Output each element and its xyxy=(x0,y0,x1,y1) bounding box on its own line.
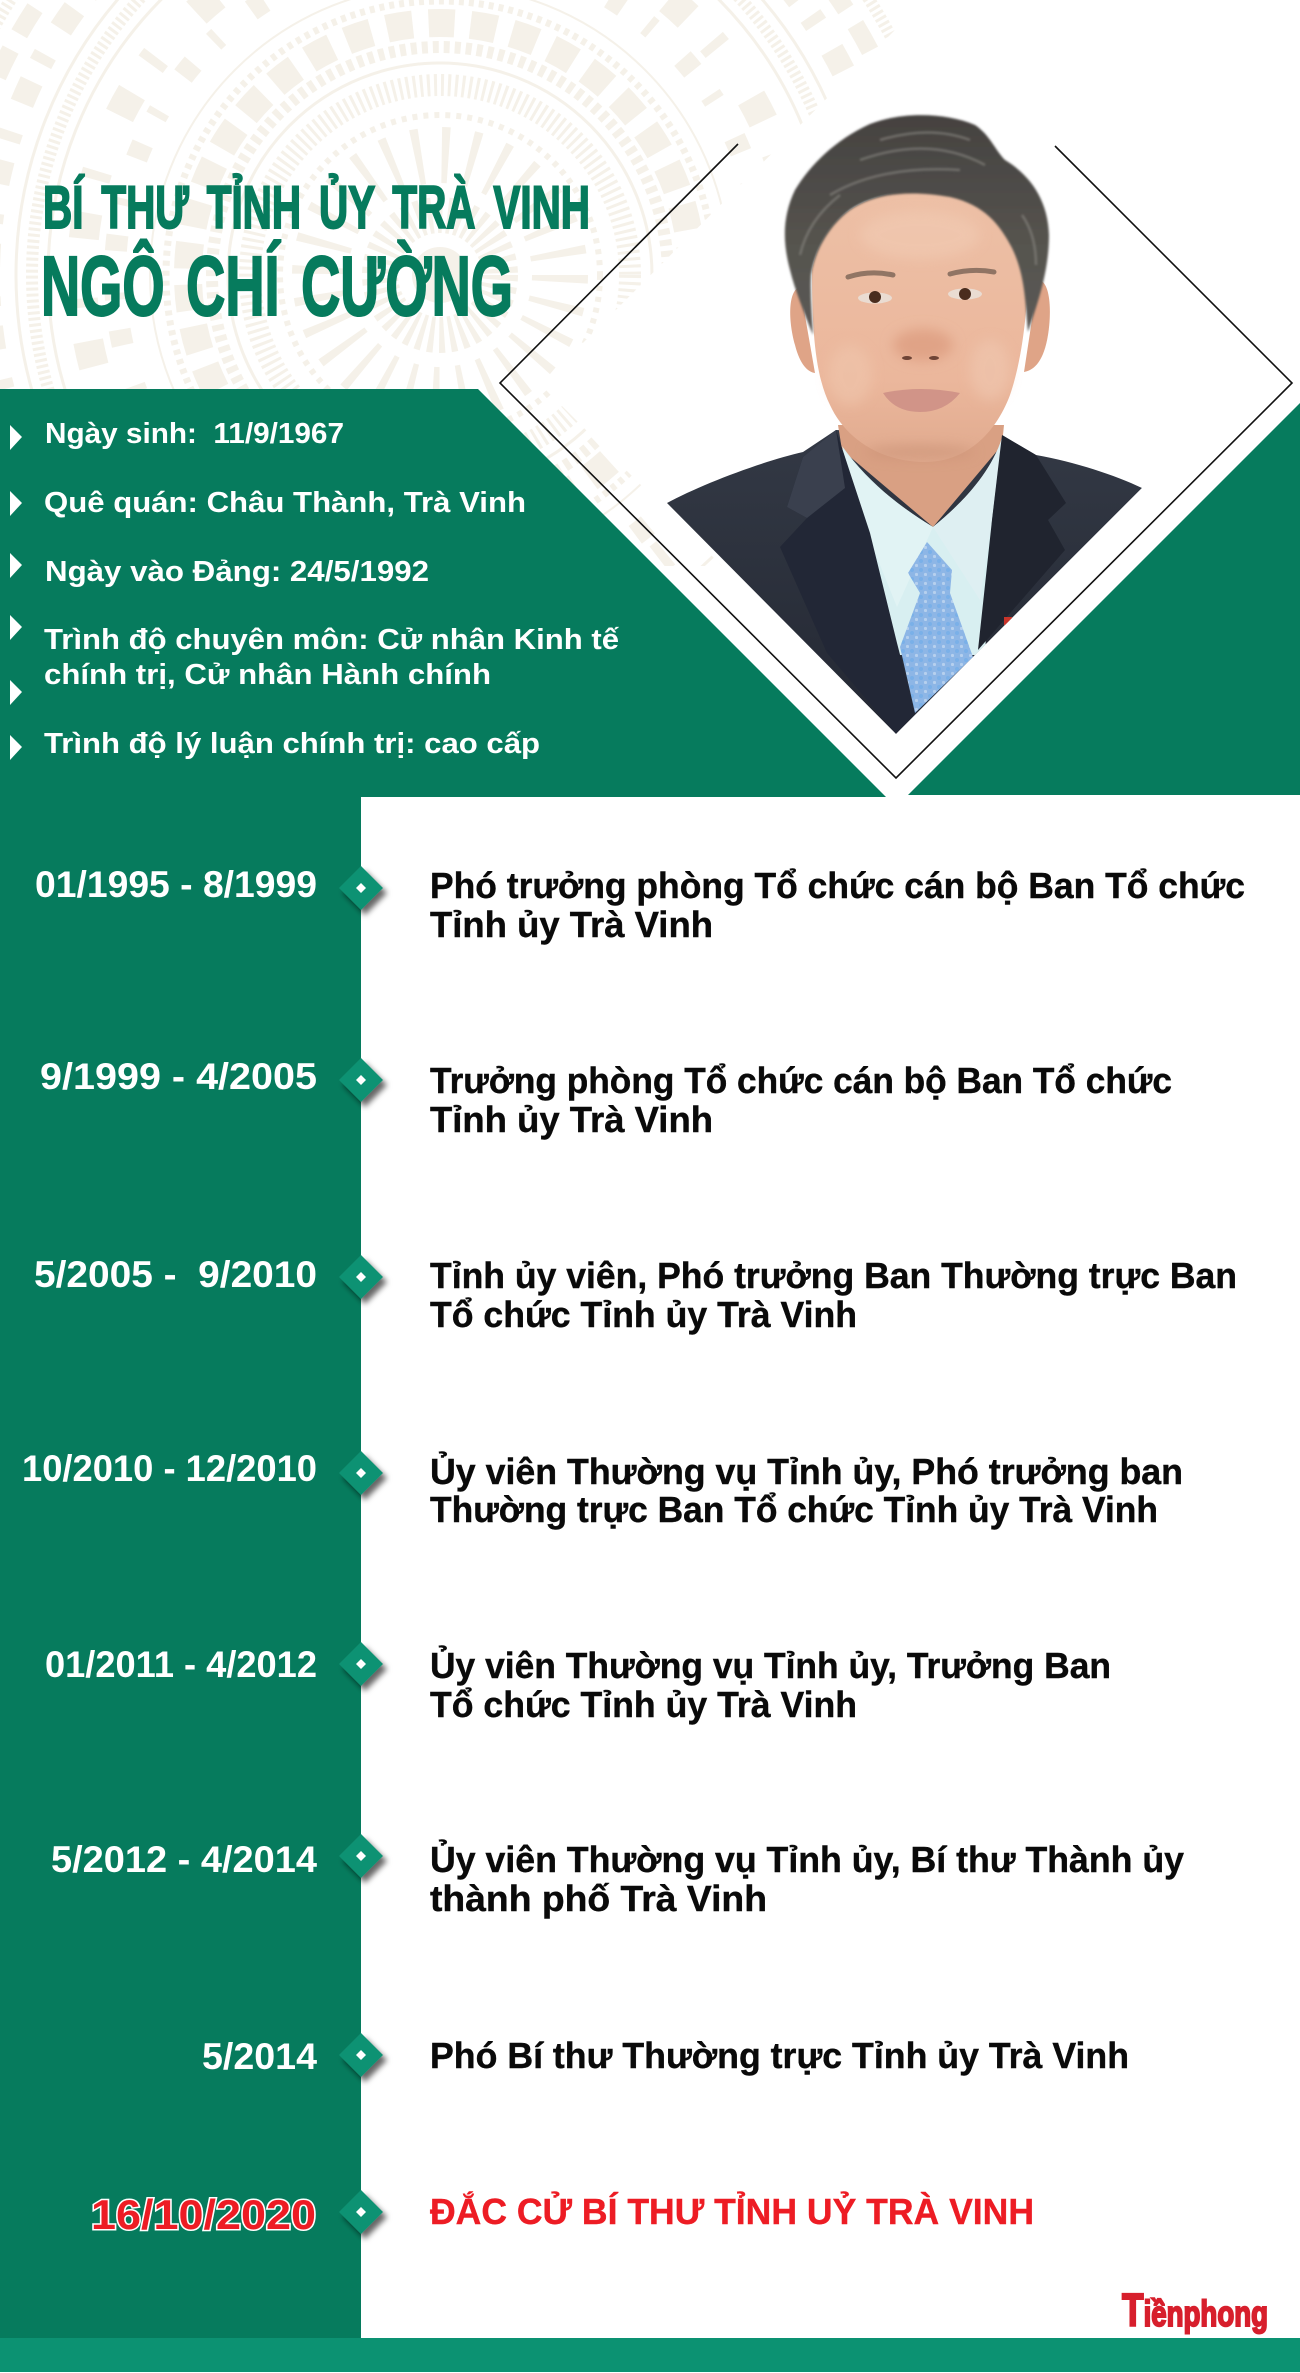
timeline item 1: Phó trưởng phòng Tổ chức cán bộ Ban Tổ chức xyxy=(430,865,1245,906)
timeline item 4: Ủy viên Thường vụ Tỉnh ủy, Phó trưởng ban xyxy=(430,1450,1183,1492)
timeline item 1 xyxy=(35,864,1245,945)
timeline item 3: Tỉnh ủy viên, Phó trưởng Ban Thường trực Ban xyxy=(430,1255,1237,1296)
timeline item 3: Tổ chức Tỉnh ủy Trà Vinh xyxy=(430,1294,857,1335)
hometown: Quê quán: Châu Thành, Trà Vinh xyxy=(44,487,526,519)
timeline item 5: Tổ chức Tỉnh ủy Trà Vinh xyxy=(430,1684,857,1725)
timeline item 2: Tỉnh ủy Trà Vinh xyxy=(430,1099,713,1140)
timeline item 8: highlighted: 16/10/2020 xyxy=(91,2191,316,2238)
timeline item 6: thành phố Trà Vinh xyxy=(430,1878,767,1919)
timeline item 5 xyxy=(45,1642,1111,1725)
timeline item 7: 5/2014 xyxy=(202,2036,317,2077)
eyebrows xyxy=(848,270,994,277)
nose xyxy=(893,329,953,361)
timeline item 4: 10/2010 - 12/2010 xyxy=(22,1448,317,1489)
face xyxy=(812,190,1028,462)
portrait photo in diamond xyxy=(667,115,1142,734)
political theory: Trình độ lý luận chính trị: cao cấp xyxy=(44,728,540,760)
education line 2: chính trị, Cử nhân Hành chính xyxy=(44,659,491,691)
timeline item 1: Tỉnh ủy Trà Vinh xyxy=(430,904,713,945)
timeline item 8: highlighted xyxy=(91,2190,1034,2238)
timeline item 4 xyxy=(22,1448,1183,1530)
ears xyxy=(790,287,815,373)
timeline item 1: 01/1995 - 8/1999 xyxy=(35,864,317,905)
panel: green info block left xyxy=(0,389,886,2338)
diamond outline frame xyxy=(500,144,1292,778)
timeline item 2 xyxy=(40,1056,1172,1140)
left upper collar xyxy=(787,430,845,518)
timeline item 3: 5/2005 - 9/2010 xyxy=(34,1254,317,1295)
hair xyxy=(785,115,1049,335)
timeline item 2: 9/1999 - 4/2005 xyxy=(40,1056,317,1097)
timeline item 3 xyxy=(34,1254,1237,1335)
timeline item 8: highlighted: ĐẮC CỬ BÍ THƯ TỈNH UỶ TRÀ VINH xyxy=(430,2190,1034,2232)
timeline item 6: 5/2012 - 4/2014 xyxy=(51,1839,317,1880)
background: bronze drum pattern xyxy=(0,0,894,566)
neck xyxy=(838,425,1004,527)
panel: green block right xyxy=(908,403,1300,795)
eyes xyxy=(858,288,982,304)
grey hair streaks xyxy=(800,132,1036,265)
shirt and collar xyxy=(842,438,1002,655)
title line 1: BÍ THƯ TỈNH ỦY TRÀ VINH xyxy=(43,174,590,241)
tie xyxy=(900,542,973,713)
bullet arrows xyxy=(10,425,22,760)
left lapel xyxy=(780,430,900,734)
timeline item 7: Phó Bí thư Thường trực Tỉnh ủy Trà Vinh xyxy=(430,2035,1129,2076)
right lapel xyxy=(978,435,1066,650)
timeline item 6 xyxy=(51,1834,1184,1919)
party admission: Ngày vào Đảng: 24/5/1992 xyxy=(45,556,429,588)
lapel pin xyxy=(1004,617,1012,625)
timeline item 2: Trưởng phòng Tổ chức cán bộ Ban Tổ chức xyxy=(430,1060,1172,1101)
education line 1: Trình độ chuyên môn: Cử nhân Kinh tế xyxy=(44,624,620,656)
mouth xyxy=(883,389,960,412)
timeline item 5: 01/2011 - 4/2012 xyxy=(45,1644,317,1685)
personal info list xyxy=(10,418,620,760)
birth date: Ngày sinh: 11/9/1967 xyxy=(45,418,344,450)
timeline item 5: Ủy viên Thường vụ Tỉnh ủy, Trưởng Ban xyxy=(430,1644,1111,1686)
timeline item 7 xyxy=(202,2033,1129,2077)
title xyxy=(41,174,590,333)
timeline item 4: Thường trực Ban Tổ chức Tỉnh ủy Trà Vinh xyxy=(430,1489,1158,1530)
bottom band xyxy=(0,2338,1300,2372)
title line 2: NGÔ CHÍ CƯỜNG xyxy=(41,239,513,333)
suit xyxy=(667,430,1142,734)
timeline item 6: Ủy viên Thường vụ Tỉnh ủy, Bí thư Thành ủy xyxy=(430,1838,1184,1880)
face shading xyxy=(828,211,1010,459)
